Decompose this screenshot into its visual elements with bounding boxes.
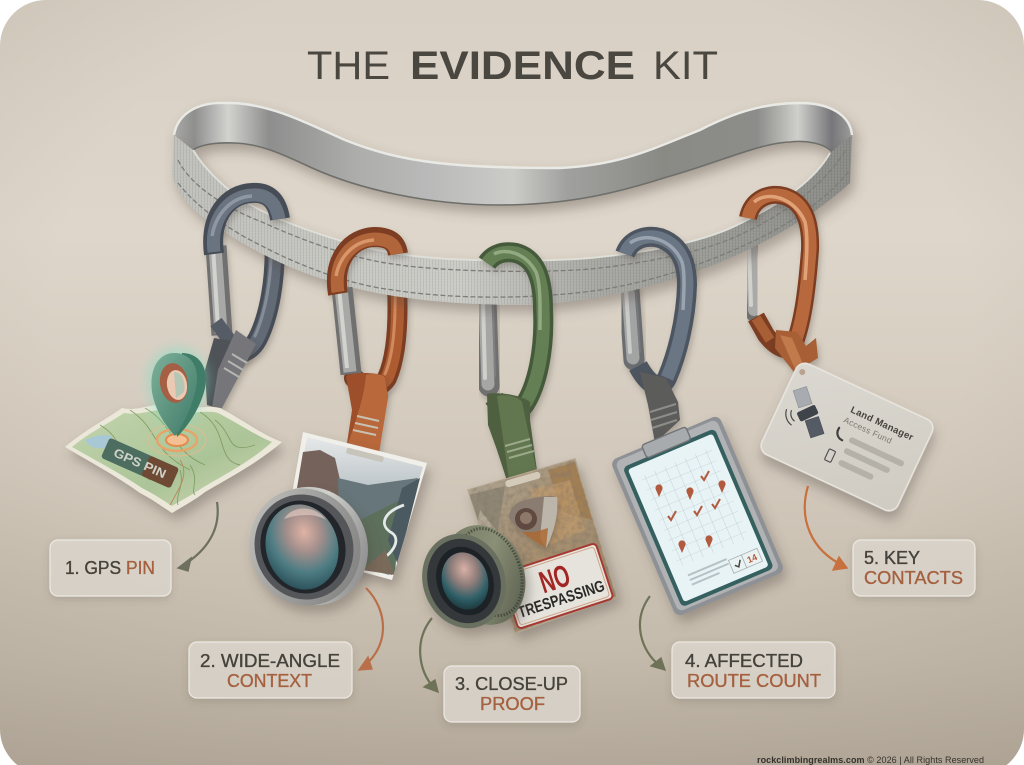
icon: satellite	[786, 386, 824, 438]
tally boxes: 14	[746, 552, 759, 565]
card name: Land Manager	[849, 405, 915, 443]
label 3: CLOSE-UP PROOF: PROOF	[480, 694, 545, 714]
strap 2	[346, 373, 388, 459]
strap 5	[775, 330, 818, 378]
sign: no trespassing	[500, 543, 614, 629]
footer credit: rockclimbingrealms.com © 2026 | All Rights Reserved	[757, 755, 984, 765]
map label: GPS PIN: GPS PIN	[111, 446, 168, 481]
metal band	[174, 103, 852, 205]
label 2: WIDE-ANGLE CONTEXT	[189, 642, 352, 698]
carabiner 1 top and gate	[212, 193, 280, 345]
lens: close-up	[409, 513, 539, 640]
tally boxes	[728, 548, 762, 573]
title: EVIDENCE	[410, 44, 635, 88]
label 1: GPS PIN: 1. GPS PIN	[65, 558, 155, 578]
belt	[172, 103, 852, 305]
icon: mobile	[824, 449, 836, 462]
map label: GPS PIN	[101, 437, 179, 489]
rock tag	[460, 455, 620, 635]
label 3: CLOSE-UP PROOF: 3. CLOSE-UP	[455, 674, 568, 694]
icon: location pin with glow	[148, 348, 207, 456]
arrow 5	[805, 486, 847, 570]
sign heading NO: NO	[535, 558, 574, 600]
arrow 3	[420, 618, 438, 692]
carabiner 3 body	[487, 251, 543, 412]
arrow 1	[178, 502, 218, 571]
strap 4	[640, 372, 680, 443]
label 3: CLOSE-UP PROOF	[444, 666, 580, 722]
carabiner 2 top and gate	[336, 237, 398, 374]
label 4: AFFECTED ROUTE COUNT	[672, 642, 835, 698]
label 2: WIDE-ANGLE CONTEXT: 2. WIDE-ANGLE	[200, 651, 340, 671]
card organisation: Access Fund	[842, 415, 894, 446]
webbing band	[172, 135, 852, 305]
clipboard	[609, 413, 785, 617]
bolt hanger	[509, 496, 557, 548]
carabiner 5 body	[748, 195, 810, 349]
contact card	[756, 359, 936, 514]
icon: phone	[835, 428, 846, 440]
strap 3	[487, 393, 538, 487]
route pins and checks	[655, 471, 726, 553]
carabiner 5 gate	[749, 248, 755, 312]
photo print	[282, 432, 427, 580]
label 5: KEY CONTACTS: CONTACTS	[864, 568, 963, 588]
title: THE	[307, 44, 390, 88]
lens: wide-angle	[233, 468, 387, 624]
map	[65, 404, 282, 513]
carabiner 4 body	[625, 237, 687, 385]
contact detail bars	[837, 436, 905, 490]
strap 1	[205, 330, 256, 408]
carabiner 2 lower body	[354, 285, 398, 387]
carabiner 1 lower body	[226, 235, 275, 353]
carabiner 4 gate	[626, 290, 640, 360]
label 4: AFFECTED ROUTE COUNT: ROUTE COUNT	[687, 671, 821, 691]
label 2: WIDE-ANGLE CONTEXT: CONTEXT	[227, 671, 312, 691]
carabiner 3 gate	[483, 300, 495, 386]
sign text TRESPASSING: TRESPASSING	[516, 578, 607, 622]
label 4: AFFECTED ROUTE COUNT: 4. AFFECTED	[685, 651, 803, 671]
label 5: KEY CONTACTS	[853, 540, 975, 596]
label 1: GPS PIN	[50, 540, 171, 596]
title: KIT	[653, 44, 718, 88]
arrow 4	[640, 596, 665, 670]
title	[307, 44, 718, 88]
label 5: KEY CONTACTS: 5. KEY	[864, 548, 920, 568]
arrow 2	[359, 588, 383, 670]
